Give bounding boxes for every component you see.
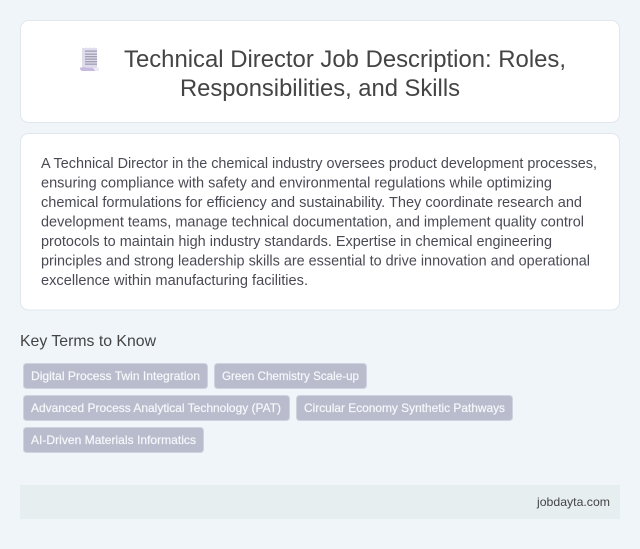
tag: digital process twin: Digital Process Twin Integration [31, 369, 200, 383]
tag: materials informatics [24, 428, 204, 452]
heading: Responsibilities, and Skills [180, 75, 460, 102]
footer bar: jobdayta.com [536, 495, 610, 509]
tag: circular economy [296, 396, 512, 420]
description text: protocols to maintain high industry standards. Expertise in chemical engineering [41, 234, 552, 250]
description text: development teams, manage technical documentation, and implement quality control [41, 214, 584, 230]
tag: green chemistry [214, 364, 366, 388]
footer bar [20, 485, 620, 519]
tag: process analytical technology [24, 396, 290, 420]
description text: chemical formulations for efficiency and sustainability. They coordinate research and [41, 195, 582, 211]
description text: ensuring compliance with safety and environmental regulations while optimizing [41, 176, 552, 192]
tag group: key terms [24, 364, 512, 452]
icon: receipt scroll [80, 48, 99, 71]
description text: A Technical Director in the chemical industry oversees product development processes, [41, 156, 597, 172]
panel: title card [20, 20, 620, 122]
description text: principles and strong leadership skills are essential to drive innovation and operational [41, 254, 590, 270]
heading [124, 46, 566, 102]
panel: description card [20, 134, 620, 310]
description text [41, 156, 597, 289]
description text: excellence within manufacturing facilities. [41, 273, 308, 289]
tag: circular economy: Circular Economy Synthetic Pathways [304, 401, 505, 415]
heading: key terms: Key Terms to Know [20, 333, 156, 350]
tag: green chemistry: Green Chemistry Scale-up [222, 369, 359, 383]
tag: materials informatics: AI-Driven Materials Informatics [31, 433, 196, 447]
tag: process analytical technology: Advanced Process Analytical Technology (PAT) [31, 401, 281, 415]
heading: Technical Director Job Description: Roles, [124, 46, 566, 73]
tag: digital process twin [24, 364, 208, 388]
